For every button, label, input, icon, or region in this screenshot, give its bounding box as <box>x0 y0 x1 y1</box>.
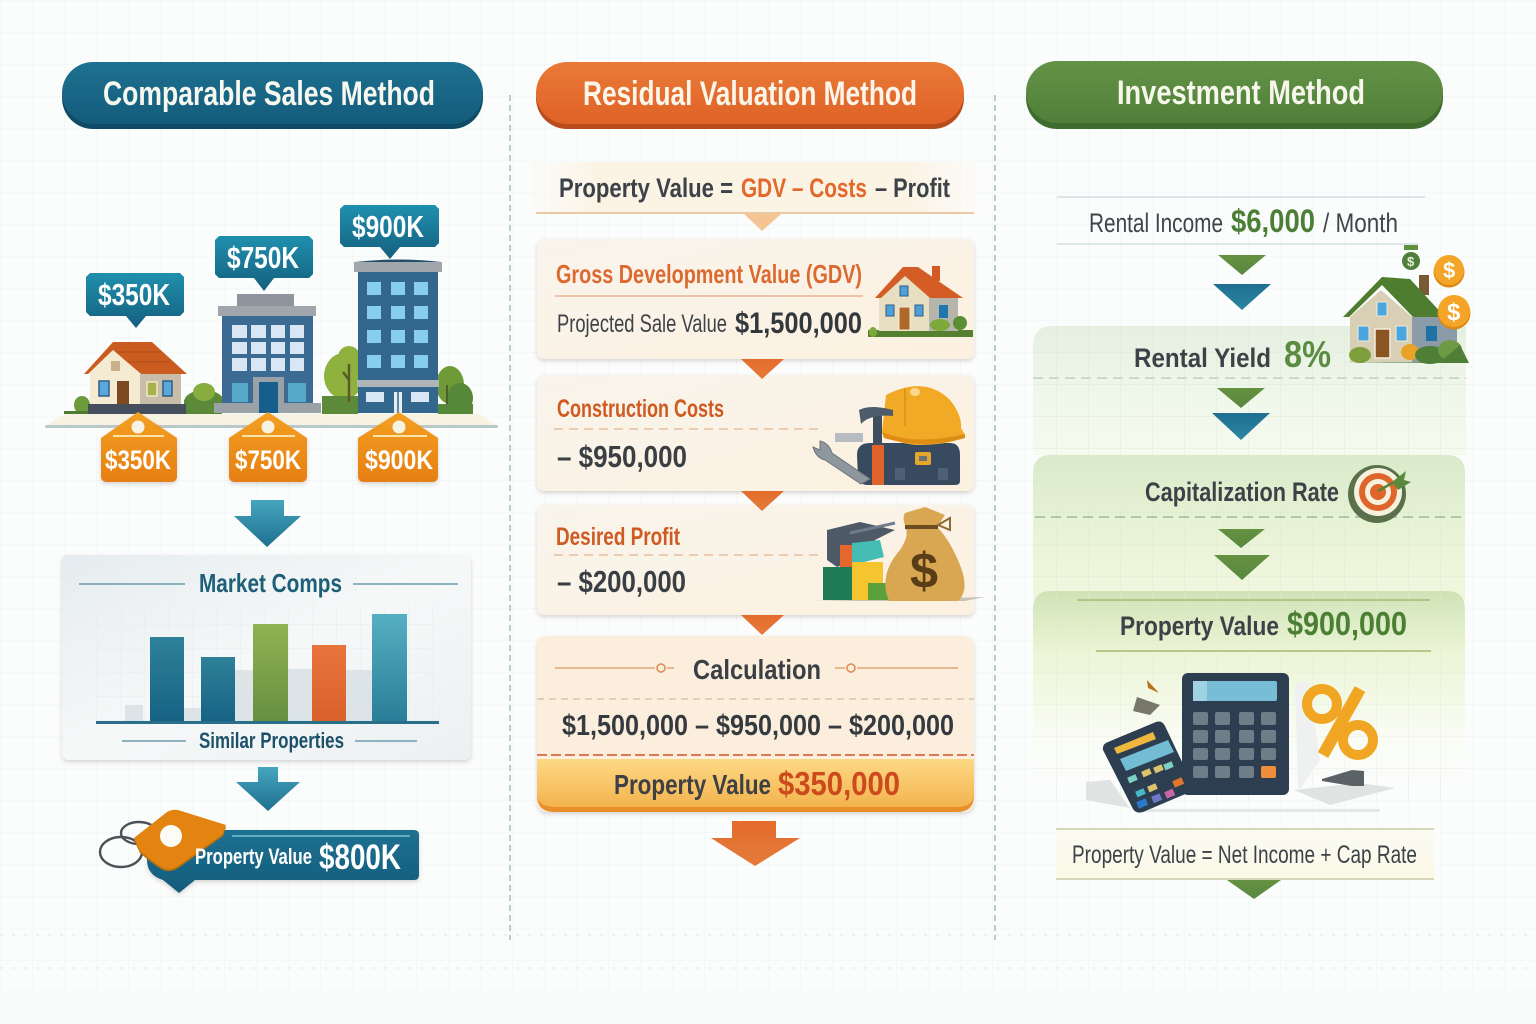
arrow: formula down <box>744 214 781 231</box>
heading: Market Comps: Market Comps <box>199 568 342 598</box>
icon: house <box>868 266 973 337</box>
card: Desired Profit: Desired Profit <box>556 523 681 551</box>
column: Residual Valuation Method <box>531 62 985 866</box>
heading: Residual Valuation Method: Residual Valuation Method <box>583 75 917 113</box>
panel: Rental Yield: 8% <box>1284 334 1331 375</box>
formula banner: Property Value = <box>559 173 733 203</box>
card: Calculation: $1,500,000 – $950,000 – $200,000 <box>562 710 954 742</box>
heading: Investment Method: Investment Method <box>1117 74 1365 112</box>
panel: Property Value $900,000 <box>1033 591 1465 800</box>
price tag: $350K <box>101 412 177 482</box>
trees and shrubs <box>64 346 473 414</box>
icon: green house with coins <box>1343 245 1470 364</box>
row: Rental Income: / Month <box>1323 208 1398 238</box>
bar chart <box>96 604 439 724</box>
card: Desired Profit <box>537 505 985 615</box>
panel: Rental Yield <box>1033 326 1466 455</box>
icon: money bag and blocks: $ <box>910 543 938 599</box>
label: Similar Properties: Similar Properties <box>199 728 344 753</box>
formula: Property Value: Property Value = Net Income + Cap Rate <box>1072 841 1417 869</box>
ground strip <box>45 414 498 428</box>
panel: Property Value $900,000: $900,000 <box>1287 605 1407 642</box>
heading: Residual Valuation Method <box>536 62 964 129</box>
icon: target with arrow <box>1348 465 1411 523</box>
icon: green house with coins: $ <box>1447 299 1461 326</box>
value tag: Property Value $800K: Property Value <box>195 844 312 869</box>
card: Construction Costs: – $950,000 <box>557 439 687 474</box>
column: Investment Method <box>1026 61 1470 899</box>
arrow: result down <box>711 821 800 866</box>
arrow: income to yield <box>1213 255 1271 310</box>
arrow: profit down <box>741 615 784 635</box>
heading: Calculation: Calculation <box>693 654 821 685</box>
illustration: calculators and percent <box>1086 673 1395 813</box>
arrow: cap rate to value <box>1214 529 1270 580</box>
formula banner: – Profit <box>875 173 950 203</box>
result band: Property Value $350,000: Property Value <box>614 769 771 800</box>
column: Comparable Sales Method <box>45 62 498 893</box>
icon: money bag and blocks <box>812 507 985 601</box>
price tag: $900K: $900K <box>365 445 433 475</box>
row: Rental Income: $6,000 <box>1231 203 1315 239</box>
panel: Capitalization Rate: Capitalization Rate <box>1145 477 1339 507</box>
result band: Property Value $350,000: $350,000 <box>778 765 900 802</box>
price tag: $750K: $750K <box>235 445 301 475</box>
formula: Property Value <box>1056 829 1434 879</box>
card: Gross Development Value: Projected Sale Value <box>557 310 727 338</box>
result band: Property Value $350,000 <box>537 759 974 812</box>
percent sign <box>1307 689 1373 755</box>
bubble: $750K: $750K <box>227 240 299 275</box>
tower building <box>354 260 442 413</box>
arrow: construction down <box>741 491 784 511</box>
icon: orange tag <box>134 810 226 871</box>
icon: green house with coins: $ <box>1443 258 1455 283</box>
card: Calculation <box>537 636 974 812</box>
panel: Rental Yield: Rental Yield <box>1134 343 1271 373</box>
scene: three properties on ground <box>45 205 498 482</box>
icon: tools and hard hat <box>813 386 965 485</box>
arrow: yield to cap rate <box>1212 388 1270 440</box>
card: Gross Development Value: $1,500,000 <box>735 307 862 340</box>
row: Rental Income: Rental Income <box>1089 208 1223 238</box>
large calculator <box>1182 673 1289 795</box>
arrow: formula down <box>1227 880 1281 899</box>
bubble: $750K <box>215 236 313 291</box>
card: Gross Development Value: Gross Development Value (GDV) <box>556 259 862 289</box>
mid-rise building <box>214 294 321 413</box>
panel: Property Value $900,000: Property Value <box>1120 611 1279 641</box>
heading: Investment Method <box>1026 61 1443 129</box>
panel: Capitalization Rate <box>1033 455 1465 600</box>
bubble: $350K <box>86 273 184 328</box>
formula banner: GDV – Costs <box>741 173 867 203</box>
paper scraps <box>1133 680 1364 786</box>
value tag: Property Value $800K: $800K <box>319 838 401 877</box>
panel: Market Comps <box>62 555 471 760</box>
heading: Comparable Sales Method: Comparable Sales Method <box>103 75 435 113</box>
heading: Comparable Sales Method <box>62 62 483 129</box>
small calculator <box>1103 722 1193 813</box>
arrow: scene to market comps <box>234 500 301 547</box>
icon: green house with coins: $ <box>1407 254 1415 269</box>
price tag: $750K <box>229 412 307 482</box>
bubble: $900K: $900K <box>352 209 424 244</box>
card: Construction Costs <box>537 375 974 491</box>
card: Construction Costs: Construction Costs <box>557 395 724 423</box>
card: Gross Development Value <box>537 239 974 359</box>
icon: key ring <box>100 822 157 867</box>
value tag: Property Value $800K <box>100 810 419 893</box>
row: Rental Income <box>1057 197 1425 244</box>
house <box>84 342 187 414</box>
card: Desired Profit: – $200,000 <box>557 564 686 599</box>
arrow: market comps to value <box>236 767 300 811</box>
bubble: $900K <box>340 205 439 259</box>
arrow: GDV down <box>741 359 784 379</box>
formula banner <box>531 162 978 214</box>
bubble: $350K: $350K <box>98 277 170 312</box>
price tag: $350K: $350K <box>105 445 171 475</box>
price tag: $900K <box>358 412 438 482</box>
heading: Calculation <box>555 654 958 685</box>
